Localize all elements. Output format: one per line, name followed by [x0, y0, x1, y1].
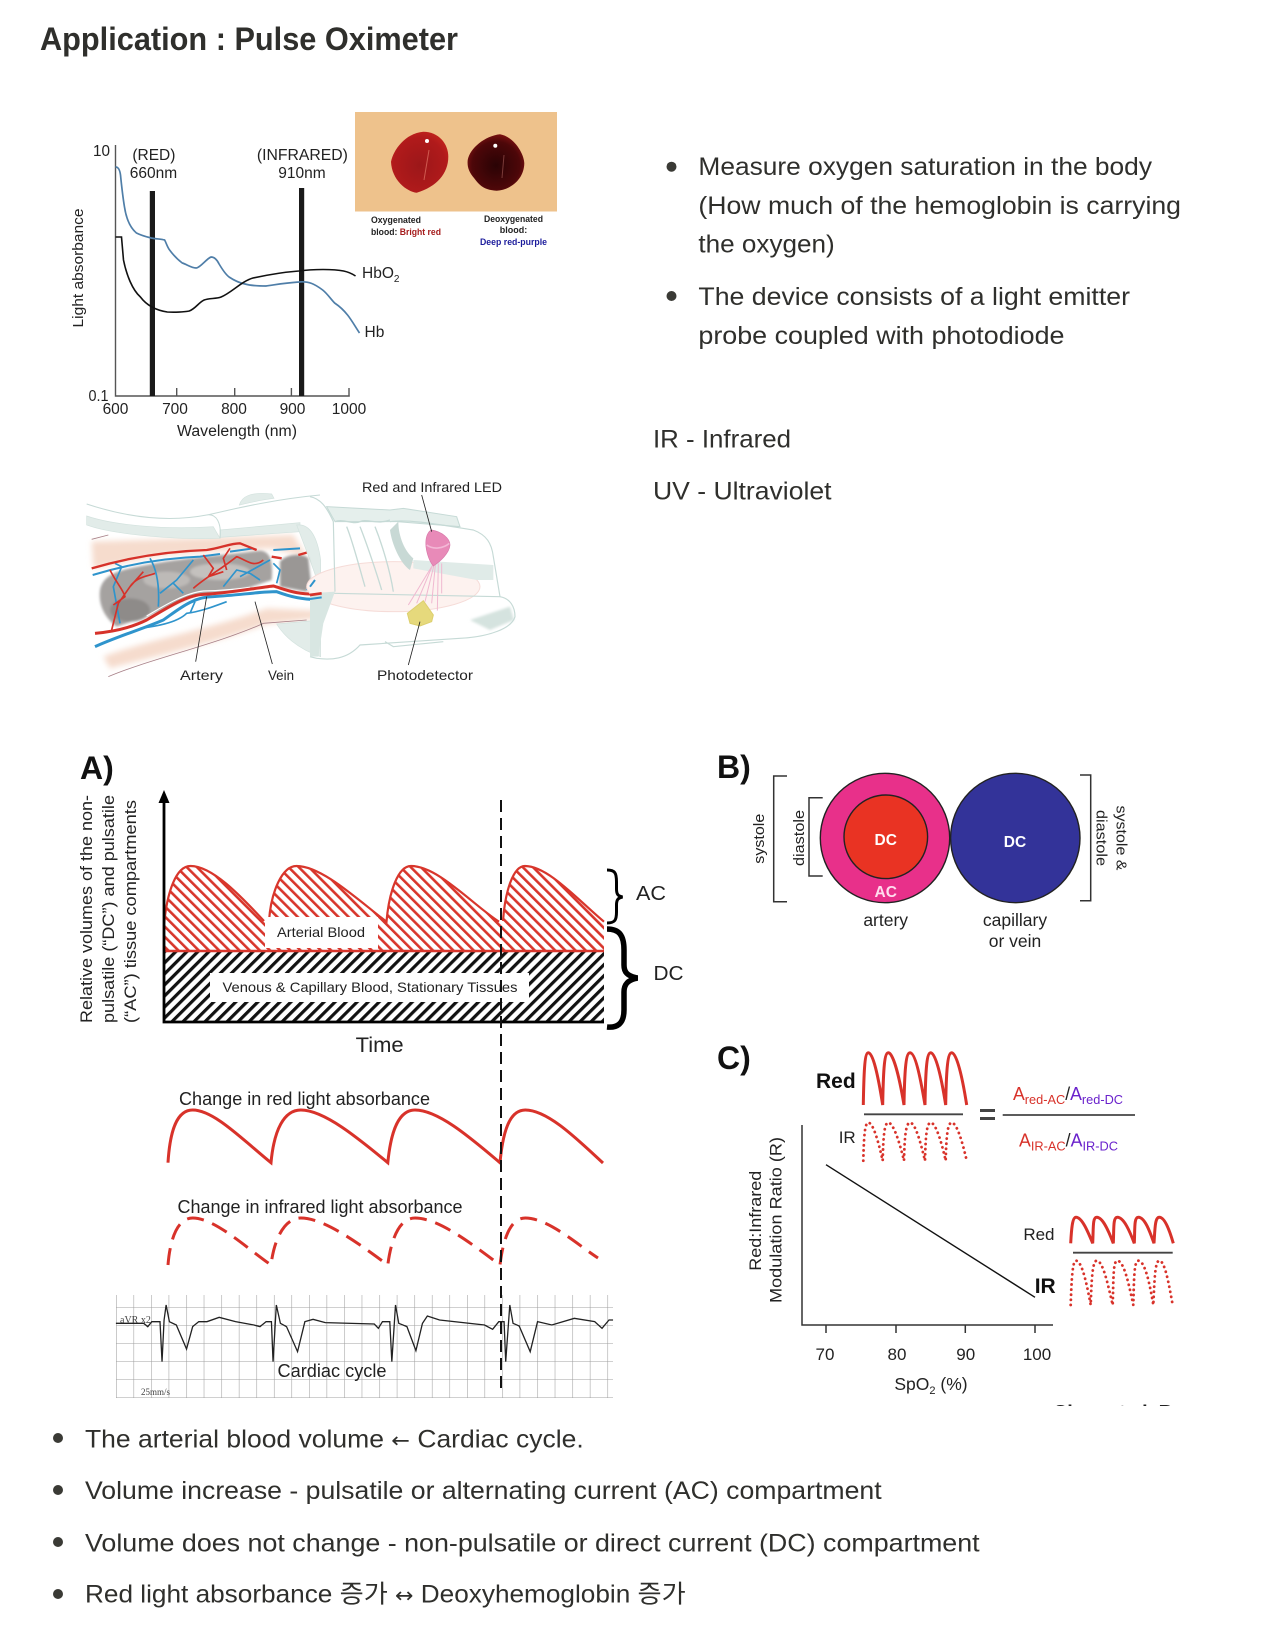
- curve labels: HbO: [362, 265, 394, 282]
- fraction rule: [1003, 1114, 1135, 1116]
- arterial outline: [164, 866, 604, 951]
- arterial hatched area: [164, 866, 604, 951]
- drop reflections: [424, 150, 429, 180]
- IR label bold: IR: [1035, 1275, 1056, 1298]
- axis value labels: 910nm: [278, 165, 326, 182]
- illustration: finger in pulse oximeter probe: [87, 479, 515, 683]
- deoxygenated caption line two: blood:: [500, 225, 527, 235]
- axes: [164, 800, 604, 1022]
- photo background: [355, 112, 557, 212]
- bullet three: Volume does not change - non-pulsatile or direct current (DC) compartment: [85, 1530, 980, 1558]
- y axis title: Light absorbance: [70, 208, 87, 328]
- bones: [100, 551, 311, 627]
- bullet text two: probe coupled with photodiode: [698, 322, 1064, 350]
- skin line: [92, 535, 307, 677]
- chart: light absorbance spectrum: [70, 143, 400, 440]
- bullet text one: [698, 153, 1181, 259]
- oxygenated blood drop: [391, 132, 448, 193]
- Hb curve: [116, 167, 360, 333]
- bullet one: The arterial blood volume ← Cardiac cycle.: [85, 1426, 584, 1454]
- LED label: Red and Infrared LED: [362, 479, 502, 495]
- artery outer circle: [820, 773, 950, 903]
- cropped source citation: Chan et al. B: [1053, 1402, 1173, 1422]
- small waveform divider: [1073, 1252, 1173, 1254]
- equals sign: [980, 1110, 995, 1118]
- capillary or vein caption: or vein: [989, 931, 1041, 951]
- panel B: artery versus vein cross sections: [717, 749, 1130, 951]
- probe ribs: [335, 520, 393, 592]
- artery label: Artery: [180, 667, 223, 683]
- ECG lead label: aVR x2: [120, 1315, 151, 1326]
- axis arrowhead: [158, 790, 170, 803]
- baseline rule: [164, 950, 604, 952]
- numerator: red-DC: [1082, 1092, 1123, 1107]
- systole bracket: [774, 776, 787, 902]
- probe cable outline: [87, 495, 320, 538]
- denominator: IR-AC: [1031, 1139, 1066, 1154]
- numerator: A: [1070, 1084, 1123, 1107]
- band under LED: [413, 560, 493, 580]
- vein end: [310, 580, 322, 599]
- denominator: A: [1019, 1131, 1066, 1154]
- venous hatched area: [164, 951, 604, 1022]
- axis value labels: 600: [103, 401, 129, 418]
- x axis title: Wavelength (nm): [177, 423, 297, 440]
- axis value labels: 0.1: [88, 388, 108, 405]
- x axis values: 80: [888, 1345, 906, 1364]
- artery caption: artery: [863, 910, 908, 930]
- bullet dot: [666, 162, 676, 172]
- denominator: /: [1066, 1131, 1071, 1151]
- bullet text one: the oxygen): [698, 231, 835, 259]
- chart axes and ticks: [116, 145, 350, 396]
- DC label: DC: [654, 963, 684, 985]
- axis value labels: 800: [221, 401, 247, 418]
- bullet dot: [666, 291, 676, 301]
- x axis values: 70: [816, 1345, 834, 1364]
- axis value labels: 10: [93, 143, 110, 160]
- axis value labels: 1000: [332, 401, 367, 418]
- y axis title: (“AC”) tissue compartments: [121, 800, 140, 1023]
- x axis values: [816, 1345, 1051, 1364]
- photo: oxygenated and deoxygenated blood: [355, 112, 557, 247]
- probe cable and band: [87, 493, 321, 657]
- HbO2 curve: [116, 237, 356, 312]
- artery DC label: DC: [875, 832, 897, 849]
- DC brace: [607, 929, 638, 1027]
- red absorbance curve: [168, 1110, 603, 1163]
- AC label: AC: [636, 883, 666, 905]
- y axis title: [77, 795, 140, 1023]
- bullet four: Red light absorbance 증가 ↔ Deoxyhemoglobin 증가: [85, 1581, 686, 1609]
- systole and diastole label: [1092, 806, 1130, 870]
- AC brace: [607, 870, 622, 923]
- probe inner shade: [390, 522, 413, 570]
- text block: compartment bullets: [53, 1426, 980, 1609]
- systole and diastole bracket: [1080, 775, 1091, 901]
- diastole label: diastole: [791, 810, 808, 866]
- x axis title: 2: [929, 1385, 936, 1397]
- x axis values: 100: [1023, 1345, 1051, 1364]
- cropped source citation: [1040, 1402, 1200, 1426]
- y axis title: Modulation Ratio (R): [767, 1137, 786, 1303]
- probe flange: [310, 592, 335, 657]
- photodetector: [407, 601, 433, 626]
- bullet dot: [53, 1589, 63, 1599]
- dark drop reflection: [502, 155, 504, 178]
- curve labels: 2: [394, 274, 400, 285]
- numerator: red-AC: [1025, 1092, 1065, 1107]
- infrared absorbance label: Change in infrared light absorbance: [178, 1197, 462, 1217]
- modulation ratio line: [826, 1165, 1035, 1297]
- veins: [93, 548, 320, 647]
- bullet dot: [53, 1537, 63, 1547]
- x axis title: SpO: [894, 1374, 929, 1394]
- artery AC label: AC: [875, 884, 897, 901]
- dashed time marker: [500, 800, 502, 1392]
- y axis title: pulsatile (“DC”) and pulsatile: [99, 795, 118, 1023]
- flesh: [92, 535, 318, 668]
- capillary or vein caption: [983, 910, 1047, 951]
- red absorbance label: Change in red light absorbance: [179, 1089, 430, 1109]
- bullet dot: [53, 1485, 63, 1495]
- oxygenated caption: Oxygenated: [371, 215, 421, 225]
- artery and vein leader lines: [196, 597, 272, 664]
- y axis title: [746, 1137, 786, 1303]
- artery and vein ends: [310, 593, 322, 595]
- panel letter: A): [80, 750, 114, 786]
- denominator: A: [1071, 1131, 1118, 1154]
- large red waveform: [863, 1053, 967, 1105]
- red and infrared wavelength bars: [152, 188, 302, 396]
- bullet text two: The device consists of a light emitter: [698, 283, 1130, 311]
- probe outline: [310, 497, 515, 659]
- x axis values: 90: [956, 1345, 975, 1364]
- ECG speed label: 25mm/s: [141, 1387, 171, 1397]
- Red label bold: Red: [816, 1070, 856, 1093]
- probe back piece: [327, 507, 460, 527]
- IR label: IR: [839, 1128, 856, 1147]
- photodetector label: Photodetector: [377, 667, 473, 683]
- LED highlight: [427, 543, 449, 548]
- panel letter: C): [717, 1040, 751, 1076]
- axis value labels: 660nm: [130, 165, 177, 182]
- Hb label: Hb: [364, 324, 384, 341]
- x axis title: (%): [936, 1374, 968, 1394]
- infrared absorbance curve: [168, 1218, 598, 1265]
- light beam: [408, 563, 442, 611]
- capillary or vein circle: [951, 773, 1080, 903]
- abbreviation UV: UV - Ultraviolet: [653, 477, 832, 505]
- axis value labels: [88, 143, 367, 418]
- deoxygenated caption: Deoxygenated: [484, 214, 543, 224]
- capillary or vein caption: capillary: [983, 910, 1047, 930]
- finger anatomy artwork: [87, 493, 321, 677]
- chart axes: [802, 1125, 1053, 1333]
- denominator: IR-DC: [1082, 1139, 1118, 1154]
- arterial blood label: Arterial Blood: [277, 924, 365, 940]
- systole and diastole label: diastole: [1092, 810, 1110, 866]
- y axis title: Red:Infrared: [746, 1171, 765, 1271]
- dotted infrared waveform: [863, 1123, 967, 1161]
- deoxygenated colour caption: Deep red-purple: [480, 237, 547, 247]
- panel C: modulation ratio chart: [717, 1040, 1173, 1397]
- numerator: A: [1013, 1084, 1065, 1107]
- panel A: AC and DC compartments: [77, 750, 684, 1398]
- ECG grid: [116, 1295, 613, 1398]
- arteries: [92, 543, 320, 633]
- axis value labels: (INFRARED): [257, 147, 348, 164]
- abbreviation IR: IR - Infrared: [653, 426, 791, 454]
- ECG strip: [116, 1295, 613, 1398]
- small dotted infrared waveform: [1071, 1261, 1173, 1305]
- pale fingertip: [307, 562, 480, 612]
- white gaps beside artery: [147, 587, 250, 616]
- Red label: Red: [1023, 1225, 1054, 1244]
- text block: oximeter description bullets: [666, 153, 1181, 350]
- oxygenated colour caption: blood: Bright red: [371, 227, 441, 237]
- arterial blood label: [265, 917, 378, 948]
- cardiac cycle label: Cardiac cycle: [278, 1361, 386, 1381]
- time label: Time: [356, 1034, 404, 1057]
- axis value labels: 700: [162, 401, 188, 418]
- vein label: Vein: [268, 667, 294, 683]
- diastole bracket: [809, 798, 823, 876]
- probe artwork: [307, 495, 515, 665]
- axis value labels: (RED): [132, 147, 175, 164]
- systole and diastole label: systole &: [1112, 806, 1130, 870]
- title: Application : Pulse Oximeter: [40, 21, 458, 57]
- axis value labels: 900: [280, 401, 306, 418]
- artery inner circle: [844, 795, 928, 879]
- bullet text one: Measure oxygen saturation in the body: [698, 153, 1153, 181]
- y axis title: Relative volumes of the non-: [77, 795, 96, 1023]
- probe end shade: [470, 607, 514, 630]
- deoxygenated blood drop: [468, 134, 524, 191]
- leader lines: [408, 495, 432, 665]
- venous blood label: [210, 973, 529, 1002]
- vein DC label: DC: [1004, 834, 1026, 851]
- bullet text one: (How much of the hemoglobin is carrying: [698, 192, 1181, 220]
- numerator: /: [1065, 1084, 1070, 1104]
- ECG trace: [116, 1305, 613, 1362]
- panel letter: B): [717, 749, 751, 785]
- waveform divider: [864, 1113, 963, 1115]
- bullet text two: [698, 283, 1130, 350]
- systole label: systole: [751, 814, 768, 864]
- bullet two: Volume increase - pulsatile or alternating current (AC) compartment: [85, 1477, 882, 1505]
- venous blood label: Venous & Capillary Blood, Stationary Tissues: [222, 979, 518, 995]
- drop highlights: [425, 139, 497, 148]
- LED: [426, 530, 450, 566]
- small red waveform: [1071, 1217, 1173, 1243]
- bullet dot: [53, 1433, 63, 1443]
